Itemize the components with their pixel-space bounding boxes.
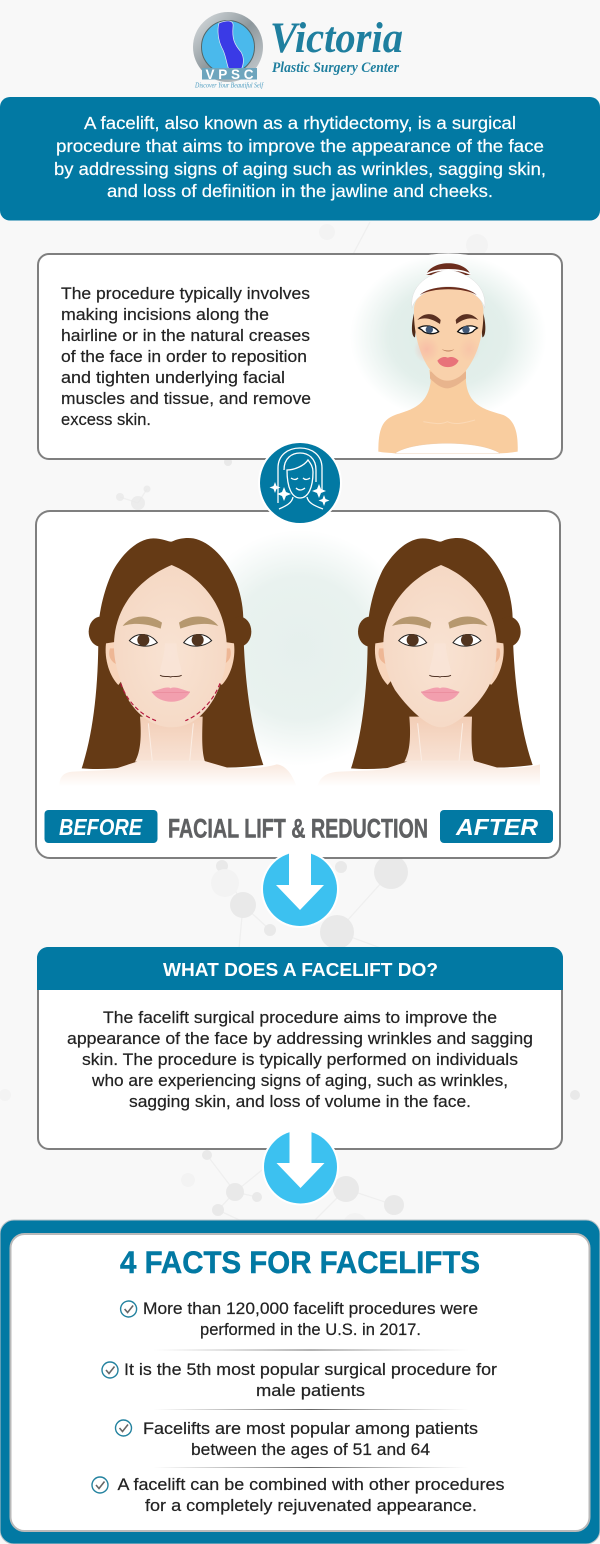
panel: before and after bbox=[36, 511, 560, 858]
illustration: woman with headband bbox=[350, 253, 547, 453]
panel: procedure bbox=[38, 253, 562, 459]
procedure text: hairline or in the natural creases bbox=[61, 327, 310, 345]
procedure text: excess skin. bbox=[61, 411, 151, 429]
panel header: WHAT DOES A FACELIFT DO? bbox=[163, 960, 438, 980]
logo name: Victoria bbox=[270, 15, 403, 62]
fact 2: male patients bbox=[256, 1382, 365, 1400]
fact 4: for a completely rejuvenated appearance. bbox=[145, 1497, 477, 1515]
procedure text: The procedure typically involves bbox=[61, 285, 310, 303]
surgical marks bbox=[121, 683, 220, 721]
logo subtitle: Plastic Surgery Center bbox=[272, 60, 399, 76]
panel body text: skin. The procedure is typically performed on individuals bbox=[82, 1051, 518, 1069]
fact 2: It is the 5th most popular surgical procedure for bbox=[124, 1361, 498, 1379]
intro text bbox=[54, 113, 546, 201]
icon: logo emblem bbox=[193, 12, 263, 82]
procedure text: muscles and tissue, and remove bbox=[61, 390, 311, 408]
panel: what does a facelift do bbox=[37, 947, 563, 1149]
illustration: face after bbox=[317, 538, 540, 787]
arrow: down to facts bbox=[262, 1128, 339, 1206]
background molecule pattern bbox=[0, 222, 580, 1237]
procedure text bbox=[61, 285, 311, 429]
facts heading: 4 FACTS FOR FACELIFTS bbox=[120, 1244, 480, 1280]
procedure text: making incisions along the bbox=[61, 306, 269, 324]
fact 3: Facelifts are most popular among patients bbox=[143, 1420, 478, 1438]
logo tagline: Discover Your Beautiful Self bbox=[194, 82, 264, 90]
fact 4 bbox=[92, 1476, 504, 1515]
background glow bbox=[185, 530, 415, 766]
fact 1 bbox=[121, 1300, 478, 1339]
fact 1: performed in the U.S. in 2017. bbox=[200, 1321, 421, 1339]
fact 3: between the ages of 51 and 64 bbox=[191, 1441, 430, 1459]
procedure text: of the face in order to reposition bbox=[61, 348, 307, 366]
before label: BEFORE bbox=[59, 814, 143, 840]
intro banner bbox=[0, 97, 600, 220]
intro text: and loss of definition in the jawline and cheeks. bbox=[107, 181, 493, 201]
illustration: face before bbox=[59, 538, 297, 787]
fact 2 bbox=[102, 1361, 498, 1400]
intro text: by addressing signs of aging such as wrinkles, sagging skin, bbox=[54, 159, 546, 179]
logo bbox=[193, 12, 403, 90]
intro text: procedure that aims to improve the appearance of the face bbox=[56, 136, 544, 156]
fact 3 bbox=[116, 1420, 478, 1459]
fact 1: More than 120,000 facelift procedures were bbox=[143, 1300, 478, 1318]
icon: face with sparkles bbox=[258, 441, 342, 525]
panel body text: appearance of the face by addressing wrinkles and sagging bbox=[67, 1030, 533, 1048]
fact 4: A facelift can be combined with other procedures bbox=[118, 1476, 504, 1494]
after label: AFTER bbox=[455, 814, 538, 840]
chart title: facial lift: FACIAL LIFT & REDUCTION bbox=[168, 814, 428, 844]
panel body text: sagging skin, and loss of volume in the face. bbox=[129, 1093, 471, 1111]
after label bbox=[440, 810, 553, 843]
panel body text: who are experiencing signs of aging, such as wrinkles, bbox=[91, 1072, 508, 1090]
procedure text: and tighten underlying facial bbox=[61, 369, 285, 387]
panel body text bbox=[67, 1009, 533, 1111]
before label bbox=[44, 810, 158, 843]
panel: 4 facts for facelifts bbox=[0, 1220, 600, 1544]
panel body text: The facelift surgical procedure aims to improve the bbox=[103, 1009, 497, 1027]
intro text: A facelift, also known as a rhytidectomy, is a surgical bbox=[84, 113, 516, 133]
panel header bbox=[37, 947, 563, 990]
arrow: down to what does a facelift do bbox=[261, 850, 339, 928]
icon: logo emblem: VPSC bbox=[206, 67, 254, 82]
